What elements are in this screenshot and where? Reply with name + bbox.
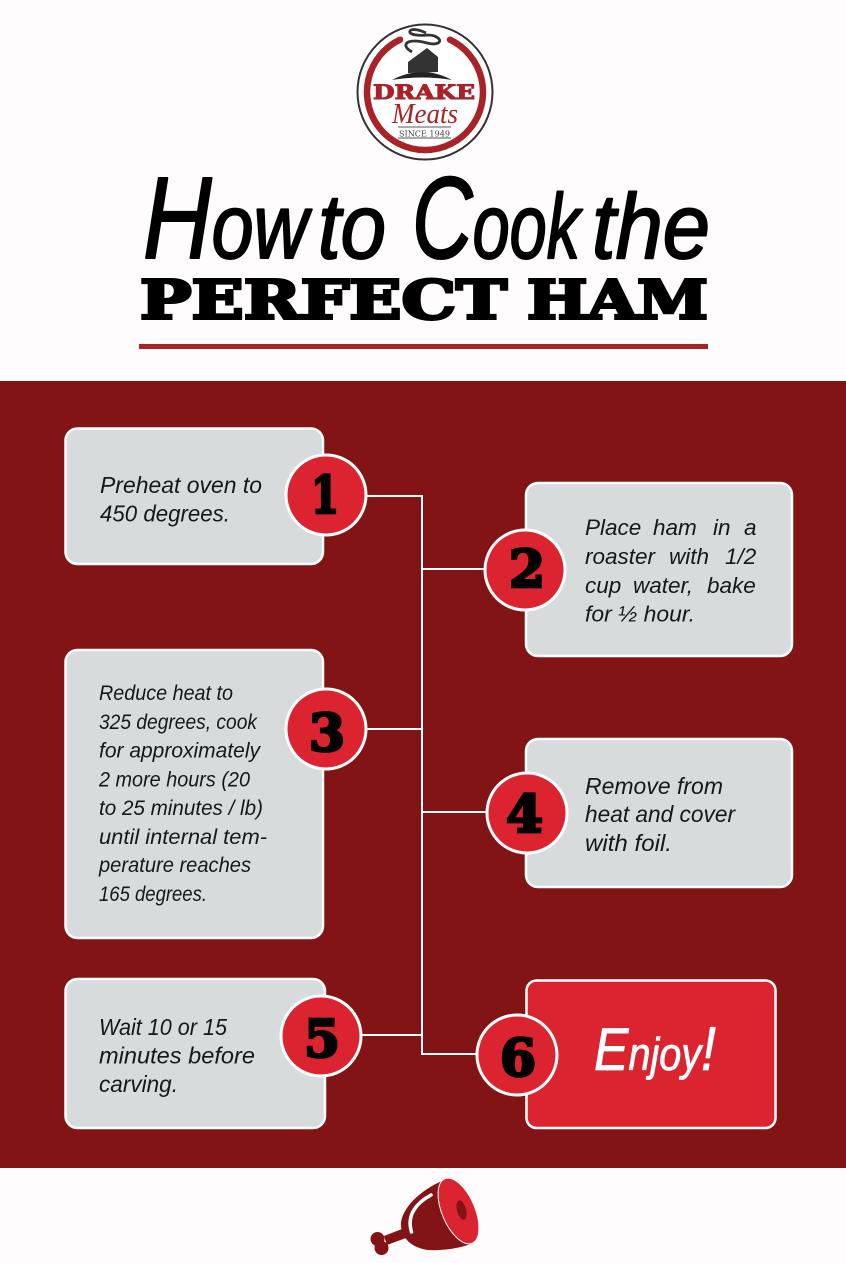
card 6 — [526, 980, 776, 1128]
title line: script: to — [318, 176, 386, 278]
number badge 4 — [487, 773, 567, 853]
card 3 text: 325 degrees, cook — [99, 711, 258, 734]
enjoy text: Enjoy! — [594, 1015, 716, 1084]
card 2 text: in — [713, 515, 731, 540]
number 2: 2 — [509, 540, 545, 600]
card 3 text: perature reaches — [98, 854, 251, 877]
card 2 text: a — [744, 515, 757, 540]
number badge 6 — [477, 1015, 557, 1095]
card 5 text: Wait 10 or 15 — [99, 1014, 227, 1040]
card 1 text: 450 degrees. — [100, 500, 230, 526]
card 2 text: roaster — [585, 544, 657, 569]
card 4 text: Remove from — [585, 773, 723, 799]
card 2 text: for ½ hour. — [585, 602, 695, 626]
card 2 text: ham — [653, 515, 697, 540]
card 3 — [66, 650, 323, 938]
number badge 5 — [281, 996, 361, 1076]
number badge 2 — [485, 530, 565, 610]
step 1 — [66, 428, 366, 564]
card 5 text: minutes before — [99, 1042, 255, 1068]
card 2 text: water, — [633, 573, 693, 598]
card 4 — [526, 739, 792, 887]
card 3 text: for approximately — [99, 740, 261, 762]
card 1 — [66, 428, 323, 564]
title line: slab: HAM — [527, 270, 708, 332]
card 4 text — [585, 773, 736, 856]
number 6: 6 — [500, 1029, 536, 1089]
title underline — [139, 344, 708, 349]
card 2 text: with — [669, 544, 709, 569]
card 2 — [526, 483, 792, 656]
card 3 text: 165 degrees. — [99, 883, 207, 906]
title line: script — [143, 153, 710, 283]
panel: steps background — [0, 381, 846, 1168]
card 2 text: 1/2 — [725, 544, 757, 569]
card 5 text: carving. — [99, 1071, 178, 1097]
card 1 text: Preheat oven to — [100, 472, 262, 498]
step 3 — [66, 650, 366, 938]
step 5 — [66, 979, 361, 1128]
card 2 text: bake — [707, 573, 756, 598]
number 3: 3 — [309, 704, 345, 764]
card 2 text: cup — [585, 573, 621, 598]
card 3 text: 2 more hours (20 — [98, 768, 250, 792]
icon: ham — [370, 1172, 487, 1255]
card 3 text: until internal tem- — [99, 826, 267, 849]
card 5 — [66, 979, 325, 1128]
card 2 text: Place — [585, 515, 641, 540]
card 4 text: heat and cover — [585, 801, 736, 827]
card 2 text — [585, 515, 757, 626]
step 2 — [485, 483, 792, 656]
number 1: 1 — [311, 466, 339, 526]
card 4 text: with foil. — [585, 830, 672, 856]
card 3 text: to 25 minutes / lb) — [99, 797, 263, 820]
step 4 — [487, 739, 792, 887]
card 3 text — [98, 682, 267, 906]
step 6 — [477, 980, 776, 1128]
title line: script: How — [143, 153, 313, 283]
title line: script: Cook — [412, 153, 583, 283]
logo: Drake Meats badge: Meats — [391, 98, 458, 130]
card 5 text — [99, 1014, 255, 1097]
logo: Drake Meats badge: SINCE 1949 — [399, 130, 450, 138]
card 3 text: Reduce heat to — [99, 682, 233, 705]
number 5: 5 — [304, 1010, 340, 1070]
title line: script: the — [592, 176, 710, 278]
logo: Drake Meats badge — [358, 24, 492, 160]
title line: slab — [140, 270, 708, 332]
number badge 3 — [286, 689, 366, 769]
card 1 text — [100, 472, 262, 526]
number 4: 4 — [506, 785, 543, 845]
connector lines — [361, 496, 488, 1054]
title — [140, 153, 710, 332]
logo: Drake Meats badge: DRAKE — [373, 80, 475, 104]
title line: slab: PERFECT — [140, 270, 507, 332]
number badge 1 — [286, 455, 366, 535]
